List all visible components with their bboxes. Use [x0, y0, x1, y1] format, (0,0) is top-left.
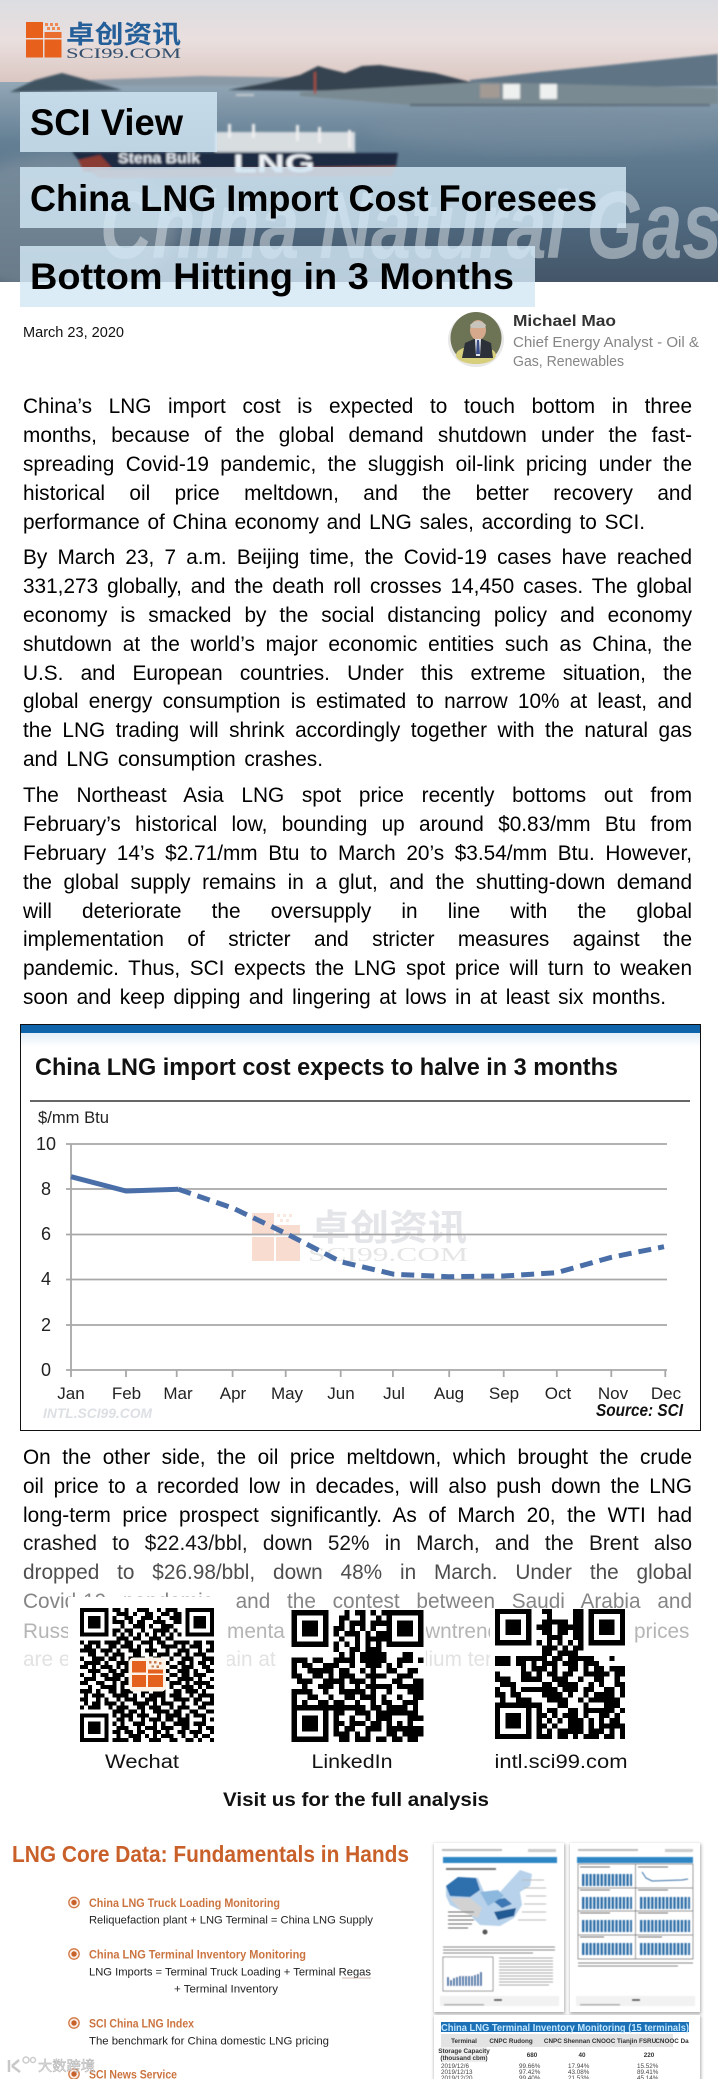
report preview: terminal inventory table: 220	[644, 2052, 655, 2059]
label: intl.sci99.com: intl.sci99.com	[494, 1752, 628, 1773]
paragraph 3	[23, 784, 692, 1009]
paragraph 4 fading out: On the other side, the oil price meltdown, which brought the crude	[23, 1446, 692, 1469]
paragraph 3: February’s historical low, bounding up around $0.83/mm Btu from	[23, 813, 692, 836]
service list	[68, 1896, 373, 2079]
item: terminal inventory: China LNG Terminal Inventory Monitoring	[89, 1950, 306, 1962]
white panels behind QR codes	[68, 1597, 227, 1757]
paragraph 2: By March 23, 7 a.m. Beijing time, the Covid-19 cases have reached	[23, 546, 692, 569]
item: SCI China LNG Index: SCI China LNG Index	[89, 2018, 195, 2030]
paragraph 4 fading out: prices	[634, 1620, 689, 1643]
author: Michael Mao: Chief Energy Analyst - Oil &	[513, 335, 699, 351]
report preview: terminal inventory table: CNPC Rudong	[489, 2038, 533, 2045]
paragraph 1: months, because of the global demand shutdown under the fast-	[23, 424, 692, 447]
paragraph 2: economy is smacked by the social distancing policy and economy	[23, 604, 692, 627]
x axis labels	[57, 1384, 682, 1403]
item: SCI China LNG Index: The benchmark for China domestic LNG pricing	[89, 2036, 329, 2048]
author: Michael Mao: Gas, Renewables	[513, 354, 624, 370]
paragraph 4 fading out: remain at	[189, 1648, 276, 1671]
paragraph 1: China’s LNG import cost is expected to touch bottom in three	[23, 395, 692, 418]
logo: SCI99	[26, 21, 181, 62]
site watermark: INTL.SCI99.COM	[43, 1405, 152, 1421]
report preview: terminal inventory table: 43.08%	[568, 2069, 590, 2076]
paragraph 1: spreading Covid-19 pandemic, the sluggish oil-link pricing under the	[23, 453, 692, 476]
x axis labels: Nov	[598, 1384, 629, 1403]
y axis labels: 8	[41, 1179, 51, 1199]
line chart panel	[20, 1024, 701, 1431]
x axis labels: Aug	[434, 1384, 464, 1403]
report preview: terminal inventory table: 15.52%	[637, 2063, 659, 2070]
x axis labels: Oct	[545, 1384, 571, 1403]
x axis labels: Feb	[112, 1384, 141, 1403]
title line: China LNG Import Cost Foresees: China LNG Import Cost Foresees	[30, 178, 597, 219]
author: Michael Mao: Michael Mao	[513, 313, 616, 330]
forecast price line	[178, 1189, 664, 1277]
paragraph 4 fading out: oil price to a recorded low in decades, will also push down the LNG	[23, 1475, 692, 1498]
paragraph 4 fading out: long-term price prospect significantly. As of March 20, the WTI had	[23, 1504, 692, 1527]
QR centre logo	[129, 1658, 166, 1692]
actual price line	[71, 1177, 178, 1191]
ship: LNG	[233, 150, 315, 178]
ship: Stena Bulk	[118, 150, 201, 167]
title line: China LNG Import Cost Foresees	[20, 167, 626, 228]
report preview: terminal inventory table: 680	[527, 2052, 538, 2059]
x axis labels: Jun	[327, 1384, 355, 1403]
report preview: terminal inventory table: Terminal	[451, 2038, 477, 2045]
paragraph 4 fading out: are expected	[23, 1648, 143, 1671]
paragraph 3: The Northeast Asia LNG spot price recently bottoms out from	[23, 784, 692, 807]
item: terminal inventory: LNG Imports = Terminal Truck Loading + Terminal Regas	[89, 1966, 371, 1978]
report preview: terminal inventory table: CNOOC Da	[655, 2038, 689, 2045]
item: truck loading: China LNG Truck Loading Monitoring	[89, 1898, 280, 1910]
paragraph 4 fading out: crashed to $22.43/bbl, down 52% in March, and the Brent also	[23, 1532, 692, 1555]
paragraph 1: performance of China economy and LNG sales, according to SCI.	[23, 511, 645, 534]
y axis labels: 6	[41, 1224, 51, 1244]
x axis labels: Sep	[489, 1384, 519, 1403]
watermark logo: SCI99.COM	[308, 1244, 468, 1266]
gridlines and axes	[66, 1144, 667, 1377]
report preview: terminal inventory table: 99.66%	[519, 2063, 541, 2070]
chart title: China LNG import cost expects to halve in 3 months	[35, 1054, 618, 1081]
paragraph 3: implementation of stricter and stricter measures against the	[23, 928, 692, 951]
date: March 23, 2020	[23, 325, 124, 341]
item: truck loading: Reliquefaction plant + LNG Terminal = China LNG Supply	[89, 1914, 373, 1926]
item: terminal inventory: + Terminal Inventory	[174, 1984, 278, 1996]
x axis labels: Jan	[57, 1384, 85, 1403]
title line: Bottom Hitting in 3 Months	[20, 246, 535, 307]
report preview: terminal inventory table: Storage Capacity	[438, 2048, 490, 2055]
logo: SCI99: 卓创资讯	[66, 21, 181, 49]
paragraph 2: shutdown at the world’s major economic entities such as China, the	[23, 633, 692, 656]
report preview: terminal inventory table: 17.94%	[568, 2063, 590, 2070]
x axis labels: Dec	[651, 1384, 682, 1403]
paragraph 3: will deteriorate the oversupply in line with the global	[23, 900, 692, 923]
report preview: terminal inventory table: 2019/12/13	[441, 2069, 473, 2076]
title line: SCI View: SCI View	[30, 102, 183, 143]
item: terminal inventory	[69, 1949, 371, 1996]
y axis labels: 0	[41, 1360, 51, 1380]
paragraph 4 fading out	[23, 1446, 692, 1671]
paragraph 3: the global supply remains in a glut, and the shutting-down demand	[23, 871, 692, 894]
paragraph 2: U.S. and European countries. Under this extreme situation, the	[23, 662, 692, 685]
QR code: LinkedIn	[292, 1610, 424, 1742]
QR code: intl.sci99.com	[495, 1609, 625, 1739]
y axis labels: 10	[36, 1134, 56, 1154]
title line: Bottom Hitting in 3 Months: Bottom Hitting in 3 Months	[30, 256, 514, 297]
paragraph 3: soon and keep dipping and lingering at lows in at least six months.	[23, 986, 666, 1009]
label: LinkedIn: LinkedIn	[312, 1752, 392, 1773]
report preview: terminal inventory table: (thousand cbm)	[440, 2055, 488, 2062]
call to action: Visit us for the full analysis	[223, 1789, 489, 1811]
y axis labels: 4	[41, 1269, 51, 1289]
QR code: Wechat	[80, 1608, 214, 1742]
ship	[72, 124, 398, 178]
report preview: terminal inventory table: 97.42%	[519, 2069, 541, 2076]
title line: SCI View	[20, 92, 217, 152]
title block	[20, 92, 626, 307]
paragraph 2: 331,273 globally, and the death roll crosses 14,450 cases. The global	[23, 575, 692, 598]
report preview: terminal inventory table	[432, 2014, 703, 2079]
report preview: terminal inventory table: 2019/12/6	[441, 2063, 470, 2070]
report preview: supply map page	[432, 1842, 567, 2015]
x axis labels: Jul	[383, 1384, 405, 1403]
paragraph 4 fading out: Covid-19 pandemic, and the contest between Saudi Arabia and	[23, 1590, 692, 1613]
paragraph 1	[23, 395, 692, 534]
paragraph 2: and LNG consumption crashes.	[23, 748, 323, 771]
label: Wechat: Wechat	[105, 1752, 180, 1773]
paragraph 4 fading out: Russia	[23, 1620, 87, 1643]
paragraph 2: global energy consumption is estimated to narrow 10% at least, and	[23, 690, 692, 713]
watermark logo: 卓创资讯	[311, 1207, 467, 1248]
paragraph 4 fading out: medium term	[388, 1648, 509, 1671]
paragraph 1: historical oil price meltdown, and the better recovery and	[23, 482, 692, 505]
watermark logo	[252, 1207, 468, 1266]
paragraph 3: pandemic. Thus, SCI expects the LNG spot price will turn to weaken	[23, 957, 692, 980]
paragraph 3: February 14’s $2.71/mm Btu to March 20’s $3.54/mm Btu. However,	[23, 842, 692, 865]
unit label: $/mm Btu	[38, 1108, 109, 1127]
report preview: charts page	[568, 1842, 703, 2016]
report preview: terminal inventory table: 89.41%	[637, 2069, 659, 2076]
x axis labels: May	[271, 1384, 304, 1403]
report preview: terminal inventory table: 40	[578, 2052, 586, 2059]
header photo: LNG terminal and carrier	[0, 0, 718, 282]
source note: Source: SCI	[596, 1400, 684, 1420]
y axis labels	[36, 1134, 56, 1380]
author: Michael Mao	[513, 313, 699, 370]
x axis labels: Apr	[220, 1384, 247, 1403]
author portrait	[448, 312, 504, 367]
platform watermark	[8, 2056, 95, 2074]
report preview: terminal inventory table: CNOOC Tianjin FSRU	[592, 2038, 657, 2045]
paragraph 2: the LNG trading will shrink accordingly together with the natural gas	[23, 719, 692, 742]
paragraph 4 fading out: mental	[227, 1620, 289, 1643]
logo: SCI99: SCI99.COM	[66, 46, 181, 62]
paragraph 2	[23, 546, 692, 771]
item: SCI China LNG Index	[69, 2018, 329, 2048]
paragraph 4 fading out: dropped to $26.98/bbl, down 48% in March. Under the global	[23, 1561, 692, 1584]
platform watermark: 大数跨境	[38, 2058, 95, 2074]
y axis labels: 2	[41, 1315, 51, 1335]
report preview: terminal inventory table: CNPC Shennan	[544, 2038, 590, 2045]
item: truck loading	[69, 1897, 373, 1926]
x axis labels: Mar	[163, 1384, 193, 1403]
paragraph 4 fading out: downtrend,	[402, 1620, 505, 1643]
